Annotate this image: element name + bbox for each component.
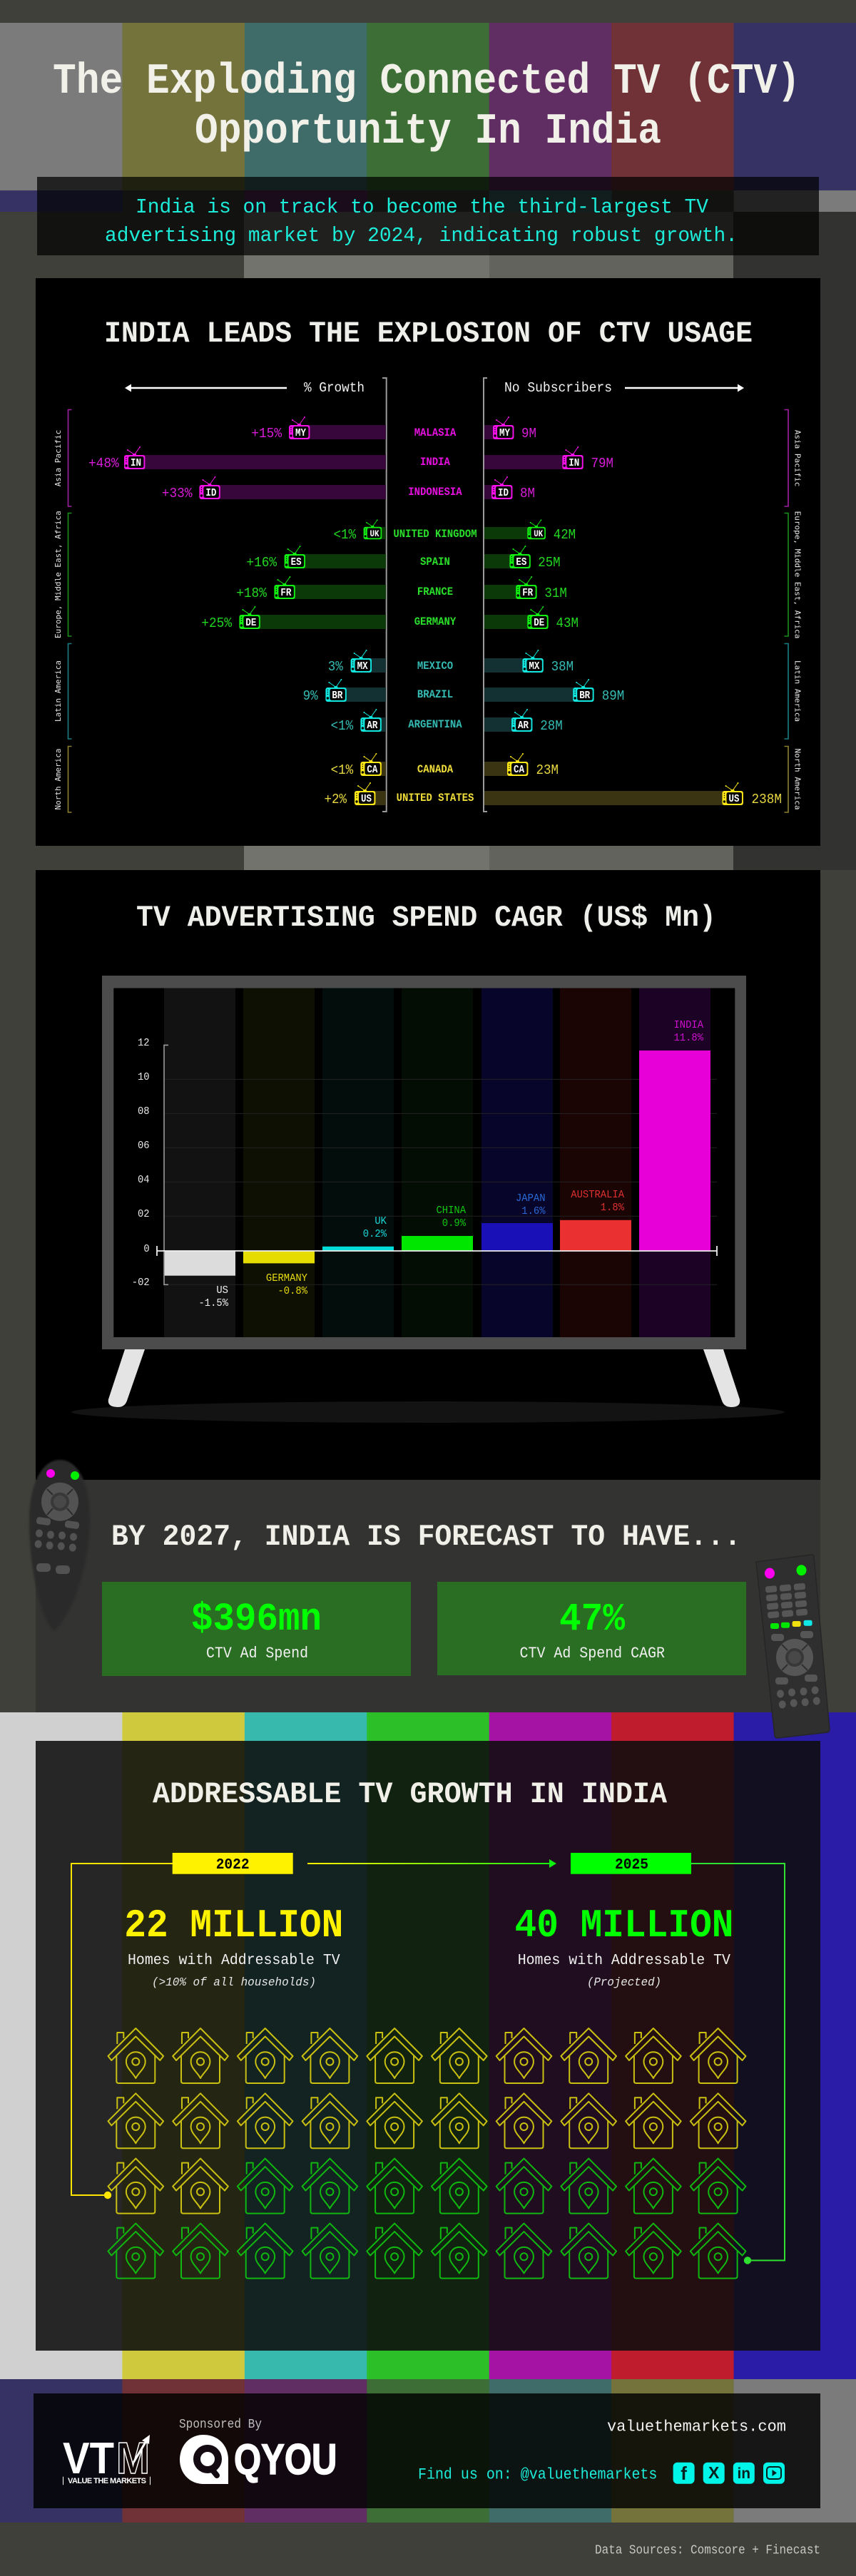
website: valuethemarkets.com [607, 2418, 786, 2436]
y-axis labels: 0 [143, 1243, 150, 1255]
stat: 22 million: Homes with Addressable TV [128, 1953, 340, 1969]
row: Malaysia: 9M [521, 426, 536, 441]
panel: TV advertising spend CAGR [36, 870, 820, 1480]
row: Malaysia: +15% [251, 426, 282, 441]
TV frame [102, 976, 746, 1349]
row: Canada: 23M [536, 762, 559, 778]
label: 2022: 2022 [216, 1857, 250, 1874]
row: Germany [201, 606, 579, 631]
heading: ad spend: TV ADVERTISING SPEND CAGR (US$ Mn) [136, 901, 716, 935]
row: France: 31M [544, 586, 567, 601]
region labels: North America [793, 748, 802, 810]
region labels: Europe, Middle East, Africa [793, 511, 802, 638]
row: Indonesia: INDONESIA [408, 486, 462, 499]
panel: 2027 forecast [36, 1480, 820, 1712]
row: India: IN [569, 457, 579, 469]
row: Argentina: AR [367, 720, 377, 732]
row: Malaysia: MALASIA [414, 426, 457, 439]
axis: percent growth [125, 380, 365, 396]
title: Opportunity In India [195, 108, 661, 156]
row: Argentina: 28M [540, 718, 563, 734]
subtitle panel: India is on track to become the third-largest TV [136, 195, 709, 219]
region labels: Latin America [793, 660, 802, 722]
row: Brazil: BRAZIL [417, 688, 453, 701]
house row 2 [108, 2093, 745, 2148]
bar: Australia [560, 1220, 631, 1251]
panel: footer [34, 2393, 820, 2508]
house row 4 [108, 2224, 745, 2279]
label: 2025: 2025 [615, 1857, 648, 1874]
panel: India leads CTV usage [36, 278, 820, 846]
connector: 2022 to homes [71, 1864, 173, 2199]
row: United States: US [361, 793, 372, 805]
bar: Japan [482, 1223, 553, 1251]
row: Brazil [303, 679, 624, 704]
stat: 22 million [124, 1903, 343, 1990]
title [53, 58, 800, 156]
label: India: 11.8% [673, 1032, 704, 1044]
card: CTV ad spend CAGR: 47% [559, 1597, 626, 1642]
icon grid: homes [108, 2028, 745, 2279]
y-axis labels: -02 [132, 1277, 150, 1289]
row: Germany: DE [534, 617, 544, 629]
sponsored by: Sponsored By [179, 2418, 262, 2432]
data sources: Data Sources: Comscore + Finecast [595, 2544, 820, 2558]
label: Germany: GERMANY [266, 1272, 307, 1284]
label: Australia [571, 1189, 625, 1214]
row: France [236, 576, 567, 601]
icon: Facebook: f [681, 2463, 687, 2484]
row: Mexico [328, 650, 574, 675]
label: China [437, 1205, 467, 1230]
y-axis labels: 10 [138, 1071, 150, 1083]
axis: number of subscribers: No Subscribers [504, 380, 612, 396]
logo: VTM [63, 2434, 151, 2485]
heading: forecast: BY 2027, INDIA IS FORECAST TO HAVE... [111, 1520, 741, 1554]
row: France: FRANCE [417, 586, 453, 598]
row: United States: US [729, 793, 739, 805]
icon: Facebook [673, 2463, 695, 2484]
row: United Kingdom: UK [370, 528, 379, 539]
row: Mexico: 3% [328, 659, 343, 675]
logo: QYOU [180, 2435, 337, 2484]
card: CTV ad spend CAGR [437, 1582, 746, 1675]
axis: number of subscribers [504, 380, 744, 396]
region labels: North America [54, 748, 63, 810]
icon: left remote control [29, 1460, 90, 1631]
label: UK: 0.2% [363, 1228, 387, 1240]
house row 1 [108, 2028, 745, 2083]
row: India [88, 446, 613, 471]
icon: X: X [708, 2463, 720, 2482]
row: Spain [246, 546, 561, 571]
label: UK [363, 1215, 387, 1240]
row: Argentina: AR [518, 720, 529, 732]
region labels: Europe, Middle East, Africa [54, 511, 63, 638]
label: 2022 [173, 1853, 293, 1874]
row: Mexico: MX [529, 660, 539, 673]
row: Canada: CA [514, 764, 524, 776]
y-axis labels: 02 [138, 1208, 150, 1220]
row: Spain: ES [516, 556, 526, 568]
zero line [157, 1246, 717, 1256]
label: India [673, 1019, 704, 1044]
row: United States: 238M [752, 792, 782, 807]
row: Indonesia: ID [498, 487, 509, 499]
row: United Kingdom [334, 519, 576, 543]
row: United Kingdom: <1% [334, 527, 356, 543]
label: 2025 [571, 1853, 691, 1874]
social handle: Find us on: @valuethemarkets [418, 2466, 657, 2484]
row: India: 79M [591, 456, 613, 471]
heading: addressable TV: ADDRESSABLE TV GROWTH IN INDIA [153, 1777, 668, 1811]
label: Japan: JAPAN [516, 1192, 545, 1205]
arrow: 2022 to 2025 [307, 1859, 556, 1868]
row: United States: +2% [324, 792, 347, 807]
label: Japan: 1.6% [521, 1205, 546, 1217]
row: Malaysia [251, 416, 536, 441]
bar: Germany [243, 1251, 315, 1263]
row: Canada: <1% [331, 762, 353, 778]
row: Indonesia: 8M [520, 486, 535, 501]
row: Mexico: 38M [551, 659, 574, 675]
row: Argentina: ARGENTINA [408, 718, 462, 731]
row: Spain: ES [291, 556, 302, 568]
row: Germany: +25% [201, 615, 232, 631]
row: Indonesia [162, 476, 535, 501]
axis: percent growth: % Growth [304, 380, 365, 396]
bar: UK [322, 1247, 394, 1251]
region labels: Asia Pacific [793, 430, 802, 486]
row: Canada [331, 753, 559, 778]
row: Argentina [331, 709, 563, 734]
y-axis labels: 04 [138, 1174, 150, 1186]
label: China: CHINA [437, 1205, 466, 1217]
row: Malaysia: MY [499, 427, 510, 439]
row: Brazil: 9% [303, 688, 318, 704]
region brackets left and right [68, 409, 788, 812]
label: Germany: -0.8% [278, 1285, 308, 1297]
label: Australia: AUSTRALIA [571, 1189, 624, 1201]
row: Malaysia: MY [295, 427, 306, 439]
y-axis bracket [164, 1045, 168, 1284]
row: France: FR [280, 587, 291, 599]
label: US: -1.5% [198, 1297, 229, 1309]
stat: 22 million: 22 MILLION [124, 1903, 343, 1948]
y-axis labels: 08 [138, 1105, 150, 1118]
bar: China [402, 1236, 473, 1251]
row: Mexico: MEXICO [417, 660, 453, 673]
bar: India [639, 1051, 710, 1251]
row: Indonesia: ID [205, 487, 216, 499]
stat: 40 million: (Projected) [587, 1976, 661, 1990]
row: United States [324, 782, 782, 807]
row: Spain: 25M [538, 555, 561, 571]
icon: right remote control [756, 1555, 830, 1738]
logo: VTM: VALUE THE MARKETS [68, 2477, 146, 2485]
y-axis labels [132, 1037, 150, 1289]
row: Brazil: BR [332, 690, 342, 702]
stat: 40 million: Homes with Addressable TV [518, 1953, 730, 1969]
row: Brazil: 89M [602, 688, 624, 704]
row: India: +48% [88, 456, 119, 471]
row: United States: UNITED STATES [397, 792, 474, 804]
y-axis labels: 12 [138, 1037, 150, 1049]
shadow under TV [71, 1401, 785, 1423]
row: France: +18% [236, 586, 267, 601]
subtitle panel: advertising market by 2024, indicating robust growth. [105, 224, 738, 247]
row: Canada: CANADA [417, 763, 454, 776]
row: Spain: +16% [246, 555, 277, 571]
stat: 40 million: 40 MILLION [515, 1903, 733, 1948]
icon: YouTube [763, 2463, 785, 2484]
row: India: INDIA [420, 456, 451, 469]
row: Germany: DE [245, 617, 256, 629]
y-axis labels: 06 [138, 1140, 150, 1152]
logo: QYOU: QYOU [234, 2436, 337, 2483]
TV legs [108, 1349, 740, 1407]
label: Germany [266, 1272, 308, 1297]
label: US: US [216, 1284, 228, 1297]
label: India: INDIA [673, 1019, 703, 1031]
row: Brazil: BR [579, 690, 590, 702]
title: The Exploding Connected TV (CTV) [53, 58, 800, 106]
bar: US [164, 1251, 235, 1276]
region labels: Latin America [54, 660, 63, 722]
logo: VTM: M [116, 2434, 150, 2483]
label: UK: UK [374, 1215, 387, 1227]
row: Indonesia: +33% [162, 486, 193, 501]
label: Australia: 1.8% [601, 1202, 625, 1214]
centre brackets [382, 378, 487, 812]
row: United Kingdom: UNITED KINGDOM [393, 528, 477, 541]
row: Mexico: MX [357, 660, 368, 673]
row: India: IN [131, 457, 141, 469]
row: Spain: SPAIN [420, 556, 450, 568]
card: CTV ad spend CAGR: CTV Ad Spend CAGR [519, 1645, 665, 1662]
heading: CTV usage: INDIA LEADS THE EXPLOSION OF CTV USAGE [104, 317, 753, 351]
stat: 40 million [515, 1903, 733, 1990]
row: Argentina: <1% [331, 718, 353, 734]
icon: X [703, 2463, 725, 2484]
label: Japan [516, 1192, 546, 1217]
row: Canada: CA [367, 764, 377, 776]
icon: LinkedIn [733, 2463, 755, 2484]
TV screen bar chart [113, 988, 735, 1337]
house row 3 [108, 2159, 745, 2214]
card: CTV ad spend: $396mn [191, 1597, 322, 1642]
icon: LinkedIn: in [737, 2465, 750, 2482]
row: United Kingdom: UK [534, 528, 543, 539]
region labels [54, 430, 802, 810]
row: Germany: 43M [556, 615, 579, 631]
connector: 2025 to homes [691, 1864, 785, 2264]
panel: addressable TV growth [36, 1741, 820, 2351]
label: China: 0.9% [442, 1217, 467, 1230]
card: CTV ad spend: CTV Ad Spend [206, 1645, 308, 1662]
subtitle panel [37, 177, 819, 255]
region labels: Asia Pacific [54, 430, 63, 486]
card: CTV ad spend [102, 1582, 411, 1676]
logo: VTM: VT [63, 2434, 114, 2483]
row: France: FR [522, 587, 533, 599]
stat: 22 million: (>10% of all households) [152, 1976, 316, 1990]
row: United Kingdom: 42M [554, 527, 576, 543]
row: Germany: GERMANY [414, 615, 457, 628]
label: US [198, 1284, 229, 1309]
